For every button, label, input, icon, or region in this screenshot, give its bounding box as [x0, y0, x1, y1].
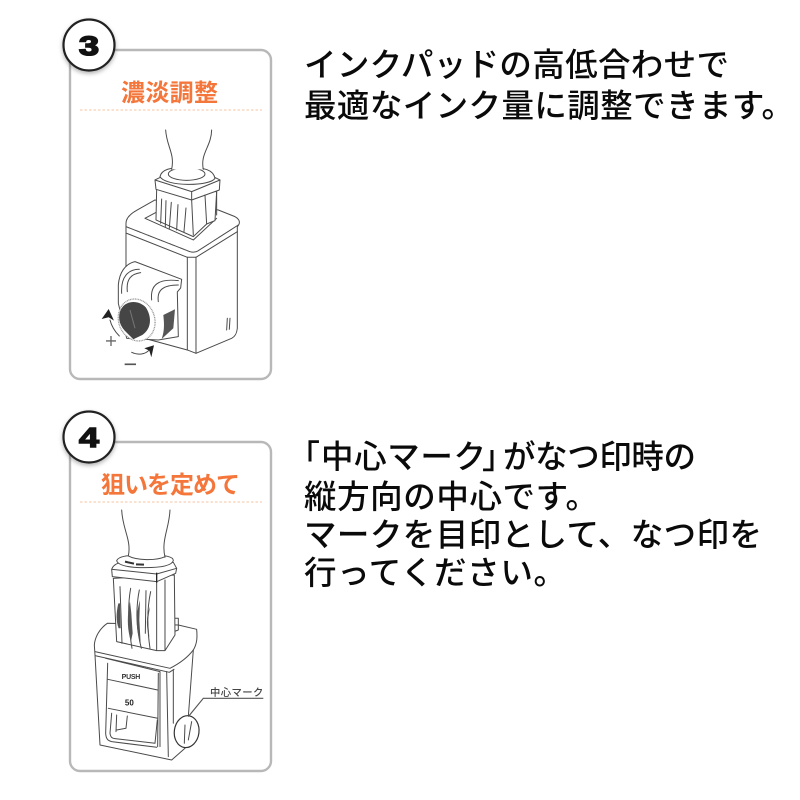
stamp body — [126, 200, 239, 353]
dark crescent inside housing — [162, 309, 175, 339]
ink pad head — [155, 177, 220, 237]
heading: 濃淡調整: 濃淡調整 — [121, 80, 218, 107]
hand and collar — [160, 130, 215, 184]
label: date mark: 50 — [125, 699, 134, 708]
text block: step 4 description: 」 — [482, 439, 515, 475]
text block: step 3 description — [304, 47, 794, 124]
icon: step number 3 — [64, 20, 114, 70]
arrow: minus direction — [132, 345, 154, 357]
text block: step 4 description: がなつ印時の — [503, 439, 696, 475]
icon: step number 3: 3 — [79, 31, 99, 61]
dial housing — [118, 262, 182, 340]
text block: step 4 description: 行ってください。 — [304, 555, 566, 591]
hand and collar — [117, 510, 173, 568]
icon: step number 4: 4 — [79, 422, 100, 453]
text block: step 4 description: 「 — [288, 439, 320, 475]
text block: step 3 description: インクパッドの高低合わせで — [304, 47, 729, 83]
stamp base — [94, 623, 197, 760]
icon: step number 4 — [64, 412, 114, 462]
stamp head — [112, 562, 178, 651]
dial knob — [112, 294, 161, 346]
heading: 狙いを定めて: 狙いを定めて — [101, 472, 240, 499]
text block: step 4 description: 縦方向の中心です。 — [304, 479, 598, 515]
callout: center mark — [172, 686, 263, 749]
illustration: hand pressing stamp with center mark — [94, 510, 263, 760]
label: PUSH: PUSH — [122, 674, 140, 681]
panel: step 4 card — [64, 412, 271, 771]
callout: center mark: 中心マーク — [210, 686, 263, 699]
minus sign — [125, 362, 136, 367]
text block: step 4 description: 中心マーク — [321, 439, 486, 475]
dotted divider under heading — [80, 109, 262, 111]
text block: step 3 description: 最適なインク量に調整できます。 — [304, 88, 794, 124]
text block: step 4 description — [288, 439, 762, 591]
window — [106, 658, 160, 747]
illustration: hand adjusting ink dial on stamp — [102, 130, 239, 364]
plus sign — [106, 336, 116, 346]
text block: step 4 description: マークを目印として、なつ印を — [304, 517, 762, 553]
panel: step 3 card — [64, 20, 271, 379]
arrow: plus direction — [102, 309, 119, 336]
dotted divider under heading — [80, 501, 262, 503]
